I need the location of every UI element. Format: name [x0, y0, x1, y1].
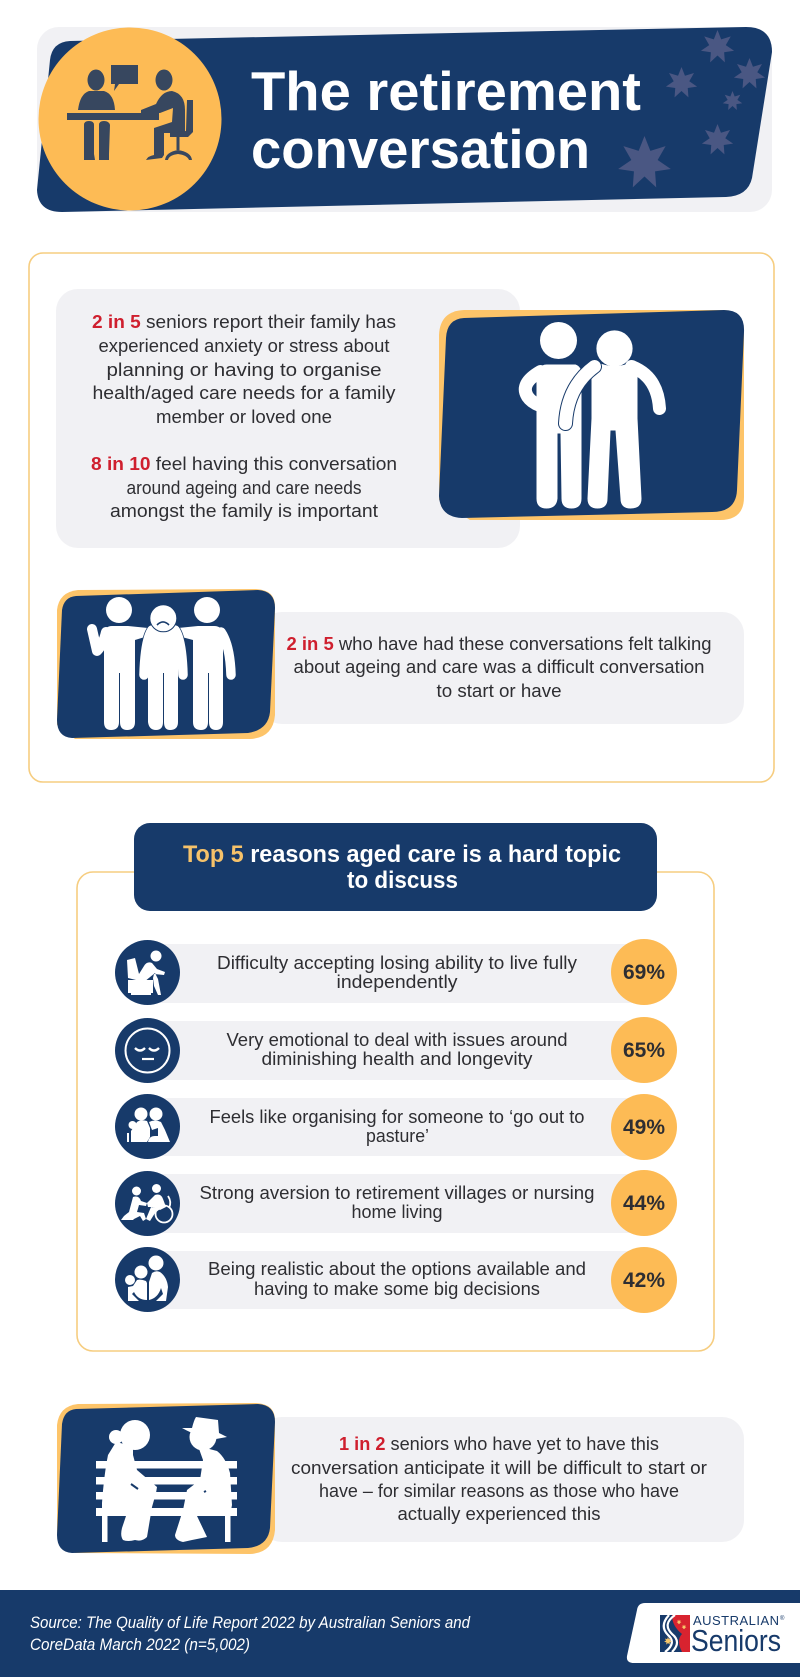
logo: Australian Seniors: AUSTRALIAN — [693, 1613, 779, 1628]
row: big decisions 42%: having to make some big decisions — [254, 1278, 540, 1299]
text block: difficult conversation: about ageing and care was a difficult conversation — [294, 656, 704, 677]
text block: family statistics: around ageing and care needs — [126, 477, 362, 498]
source note — [30, 1614, 471, 1654]
row: losing independence 69%: independently — [336, 971, 458, 992]
heading: top 5 reasons: to discuss — [347, 867, 458, 894]
text block: yet to have conversation: have – for similar reasons as those who have — [319, 1480, 679, 1501]
text block: family statistics — [56, 289, 520, 548]
panel: family conversation — [29, 253, 774, 782]
decorative stars — [618, 30, 765, 187]
text block: family statistics: planning or having to organise — [106, 359, 382, 380]
icon: sad closed-eyes face — [115, 1018, 180, 1083]
row: retirement village aversion 44% — [115, 1170, 677, 1236]
row: emotional 65%: Very emotional to deal with issues around — [226, 1029, 568, 1050]
row: losing independence 69%: Difficulty accepting losing ability to live fully — [217, 952, 578, 973]
text block: family statistics: experienced anxiety or stress about — [98, 335, 390, 356]
percentage: 42% — [611, 1247, 677, 1313]
icon: family group — [115, 1094, 180, 1159]
text block: yet to have conversation: conversation anticipate it will be difficult to start or — [291, 1457, 707, 1478]
percentage: 69%: 69% — [623, 961, 665, 984]
icon: family embrace — [115, 1247, 180, 1312]
row: out to pasture 49%: Feels like organising for someone to ‘go out to — [210, 1106, 584, 1127]
heading: top 5 reasons — [134, 823, 657, 911]
percentage: 49%: 49% — [623, 1116, 665, 1139]
title — [251, 60, 641, 180]
icon card: sad person supported by two friends — [57, 589, 275, 739]
text block: difficult conversation — [260, 612, 744, 724]
icon: person slumped in armchair — [115, 940, 180, 1005]
title: The retirement — [251, 60, 641, 122]
percentage: 65% — [611, 1017, 677, 1083]
percentage: 69% — [611, 939, 677, 1005]
icon card: carer supporting person — [439, 310, 744, 520]
logo: Australian Seniors: Seniors — [691, 1623, 781, 1658]
row: retirement village aversion 44%: home living — [352, 1201, 442, 1222]
footer — [0, 1590, 800, 1677]
text block: difficult conversation: 2 in 5 who have had these conversations felt talking — [286, 633, 712, 654]
title: conversation — [251, 118, 590, 180]
percentage: 44% — [611, 1170, 677, 1236]
heading: top 5 reasons: Top 5 reasons aged care is a hard topic — [183, 841, 621, 868]
row: emotional 65% — [115, 1017, 677, 1083]
text block: family statistics: member or loved one — [156, 406, 332, 427]
text block: family statistics: 2 in 5 seniors report their family has — [92, 311, 396, 332]
panel: top 5 reasons — [77, 823, 714, 1351]
logo: Australian Seniors: ® — [780, 1615, 785, 1622]
percentage: 65%: 65% — [623, 1039, 665, 1062]
row: big decisions 42%: Being realistic about the options available and — [208, 1258, 586, 1279]
logo: Australian Seniors — [627, 1603, 800, 1663]
row: out to pasture 49% — [115, 1094, 677, 1160]
row: emotional 65%: diminishing health and longevity — [262, 1048, 533, 1069]
row: big decisions 42% — [115, 1247, 677, 1313]
source note: CoreData March 2022 (n=5,002) — [30, 1636, 250, 1654]
text block: family statistics: amongst the family is important — [110, 500, 378, 521]
text block: yet to have conversation: actually experienced this — [398, 1503, 600, 1524]
row: retirement village aversion 44%: Strong aversion to retirement villages or nursing — [200, 1182, 594, 1203]
header banner — [37, 27, 772, 212]
percentage: 49% — [611, 1094, 677, 1160]
text block: difficult conversation: to start or have — [436, 680, 562, 701]
text block: yet to have conversation — [260, 1417, 744, 1542]
percentage: 44%: 44% — [623, 1192, 665, 1215]
text block: family statistics: 8 in 10 feel having this conversation — [91, 453, 397, 474]
icon: two people talking at a desk — [38, 28, 222, 210]
row: losing independence 69% — [115, 939, 677, 1005]
text block: yet to have conversation: 1 in 2 seniors who have yet to have this — [339, 1433, 659, 1454]
row: out to pasture 49%: pasture’ — [366, 1125, 429, 1146]
text block: family statistics: health/aged care needs for a family — [92, 382, 396, 403]
icon card: couple on bench — [57, 1403, 275, 1554]
source note: Source: The Quality of Life Report 2022 by Australian Seniors and — [30, 1614, 471, 1632]
percentage: 42%: 42% — [623, 1269, 665, 1292]
icon: carer kneeling by wheelchair — [115, 1171, 180, 1236]
